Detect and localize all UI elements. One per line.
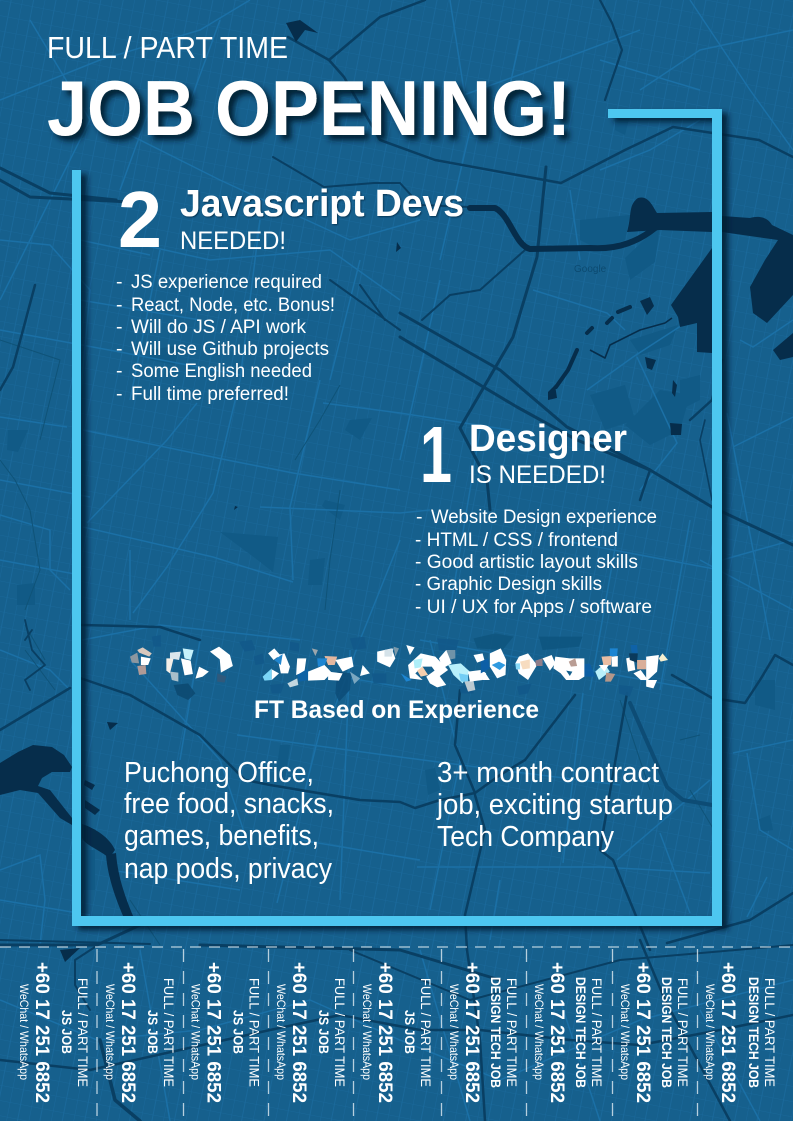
developer requirements list: Will use Github projects — [131, 338, 329, 360]
designer requirements list: - Good artistic layout skills — [415, 551, 638, 573]
strip 9: WeChat / WhatsApp — [703, 984, 717, 1080]
strip 9 — [703, 962, 778, 1103]
text block: contract details: job, exciting startup — [436, 789, 673, 821]
developer requirements list: JS experience required — [131, 271, 322, 293]
strip 7: +60 17 251 6852 — [546, 962, 567, 1103]
strip 3: FULL / PART TIME — [246, 978, 262, 1087]
designer requirements list: - — [416, 506, 422, 528]
developer requirements list: - — [116, 294, 122, 316]
strip 4: +60 17 251 6852 — [288, 962, 309, 1103]
strip 7: WeChat / WhatsApp — [532, 984, 546, 1080]
strip 6: WeChat / WhatsApp — [447, 984, 461, 1080]
strip 3: JS JOB — [230, 1010, 246, 1054]
strip 1: FULL / PART TIME — [75, 978, 91, 1087]
subheading: needed: NEEDED! — [180, 227, 286, 255]
designer requirements list: - UI / UX for Apps / software — [415, 596, 652, 618]
strip 4 — [274, 962, 348, 1103]
developer requirements list: Full time preferred! — [131, 383, 289, 405]
strip 9: FULL / PART TIME — [762, 978, 778, 1087]
subheading: is needed: IS NEEDED! — [469, 461, 606, 489]
developer requirements list: - — [116, 383, 122, 405]
designer requirements list: - Graphic Design skills — [415, 573, 602, 595]
number 1: 1 — [420, 410, 452, 499]
google watermark: Google — [574, 264, 607, 275]
heading: designer: Designer — [469, 418, 627, 460]
strip 2: JS JOB — [145, 1010, 161, 1054]
strip 4: FULL / PART TIME — [332, 978, 348, 1087]
developer requirements list — [116, 271, 335, 405]
strip 7: DESIGN TECH JOB — [573, 977, 589, 1088]
strip 8: DESIGN TECH JOB — [659, 977, 675, 1088]
strip 7 — [532, 962, 605, 1103]
strip 6: +60 17 251 6852 — [461, 962, 482, 1103]
strip 5: WeChat / WhatsApp — [360, 984, 374, 1080]
tear-off strips — [17, 962, 778, 1103]
strip 4: JS JOB — [316, 1010, 332, 1054]
text block: contract details — [436, 757, 673, 853]
text block: contract details: Tech Company — [437, 821, 615, 853]
developer requirements list: Some English needed — [131, 360, 312, 382]
strip 3 — [188, 962, 262, 1103]
strip 9: DESIGN TECH JOB — [746, 977, 762, 1088]
text block: office perks: Puchong Office, — [124, 757, 314, 789]
strip 8: +60 17 251 6852 — [632, 962, 653, 1103]
strip 6 — [447, 962, 520, 1103]
developer requirements list: React, Node, etc. Bonus! — [131, 294, 335, 316]
developer requirements list: Will do JS / API work — [131, 316, 306, 338]
strip 1 — [17, 962, 91, 1103]
tear-off strip cut lines — [0, 947, 793, 1121]
strip 3: +60 17 251 6852 — [202, 962, 224, 1103]
strip 8: FULL / PART TIME — [675, 978, 691, 1087]
designer requirements list: Website Design experience — [431, 506, 657, 528]
developer requirements list: - — [116, 316, 122, 338]
text block: office perks: free food, snacks, — [124, 788, 334, 820]
strip 2 — [103, 962, 177, 1103]
heading: javascript devs: Javascript Devs — [180, 183, 464, 225]
strip 9: +60 17 251 6852 — [717, 962, 738, 1103]
strip 6: FULL / PART TIME — [504, 978, 520, 1087]
strip 1: JS JOB — [59, 1010, 75, 1054]
strip 8 — [618, 962, 691, 1103]
title: JOB OPENING! — [47, 64, 571, 152]
strip 5: JS JOB — [402, 1010, 418, 1054]
text block: contract details: 3+ month contract — [437, 757, 659, 789]
strip 7: FULL / PART TIME — [589, 978, 605, 1087]
panel: designer — [415, 410, 657, 618]
strip 2: FULL / PART TIME — [161, 978, 177, 1087]
number 2: 2 — [118, 175, 162, 264]
heading: full part time: FULL / PART TIME — [47, 30, 288, 65]
designer requirements list: - HTML / CSS / frontend — [415, 529, 618, 551]
developer requirements list: - — [116, 360, 122, 382]
strip 1: +60 17 251 6852 — [31, 962, 52, 1103]
text block: office perks: nap pods, privacy — [124, 853, 333, 885]
strip 5: +60 17 251 6852 — [374, 962, 395, 1103]
designer requirements list — [415, 506, 657, 618]
strip 1: WeChat / WhatsApp — [17, 984, 31, 1080]
pixelated salary mosaic — [130, 633, 668, 702]
developer requirements list: - — [116, 338, 122, 360]
strip 5 — [360, 962, 434, 1103]
strip 3: WeChat / WhatsApp — [188, 984, 202, 1080]
strip 5: FULL / PART TIME — [418, 978, 434, 1087]
strip 4: WeChat / WhatsApp — [274, 984, 288, 1080]
text block: office perks: games, benefits, — [124, 820, 319, 852]
frame — [72, 109, 722, 926]
strip 8: WeChat / WhatsApp — [618, 984, 632, 1080]
strip 6: DESIGN TECH JOB — [488, 977, 504, 1088]
strip 2: +60 17 251 6852 — [117, 962, 138, 1103]
text block: office perks — [124, 757, 334, 885]
developer requirements list: - — [116, 271, 122, 293]
strip 2: WeChat / WhatsApp — [103, 984, 117, 1080]
panel: javascript devs — [116, 175, 464, 405]
salary caption: FT Based on Experience — [254, 696, 539, 724]
